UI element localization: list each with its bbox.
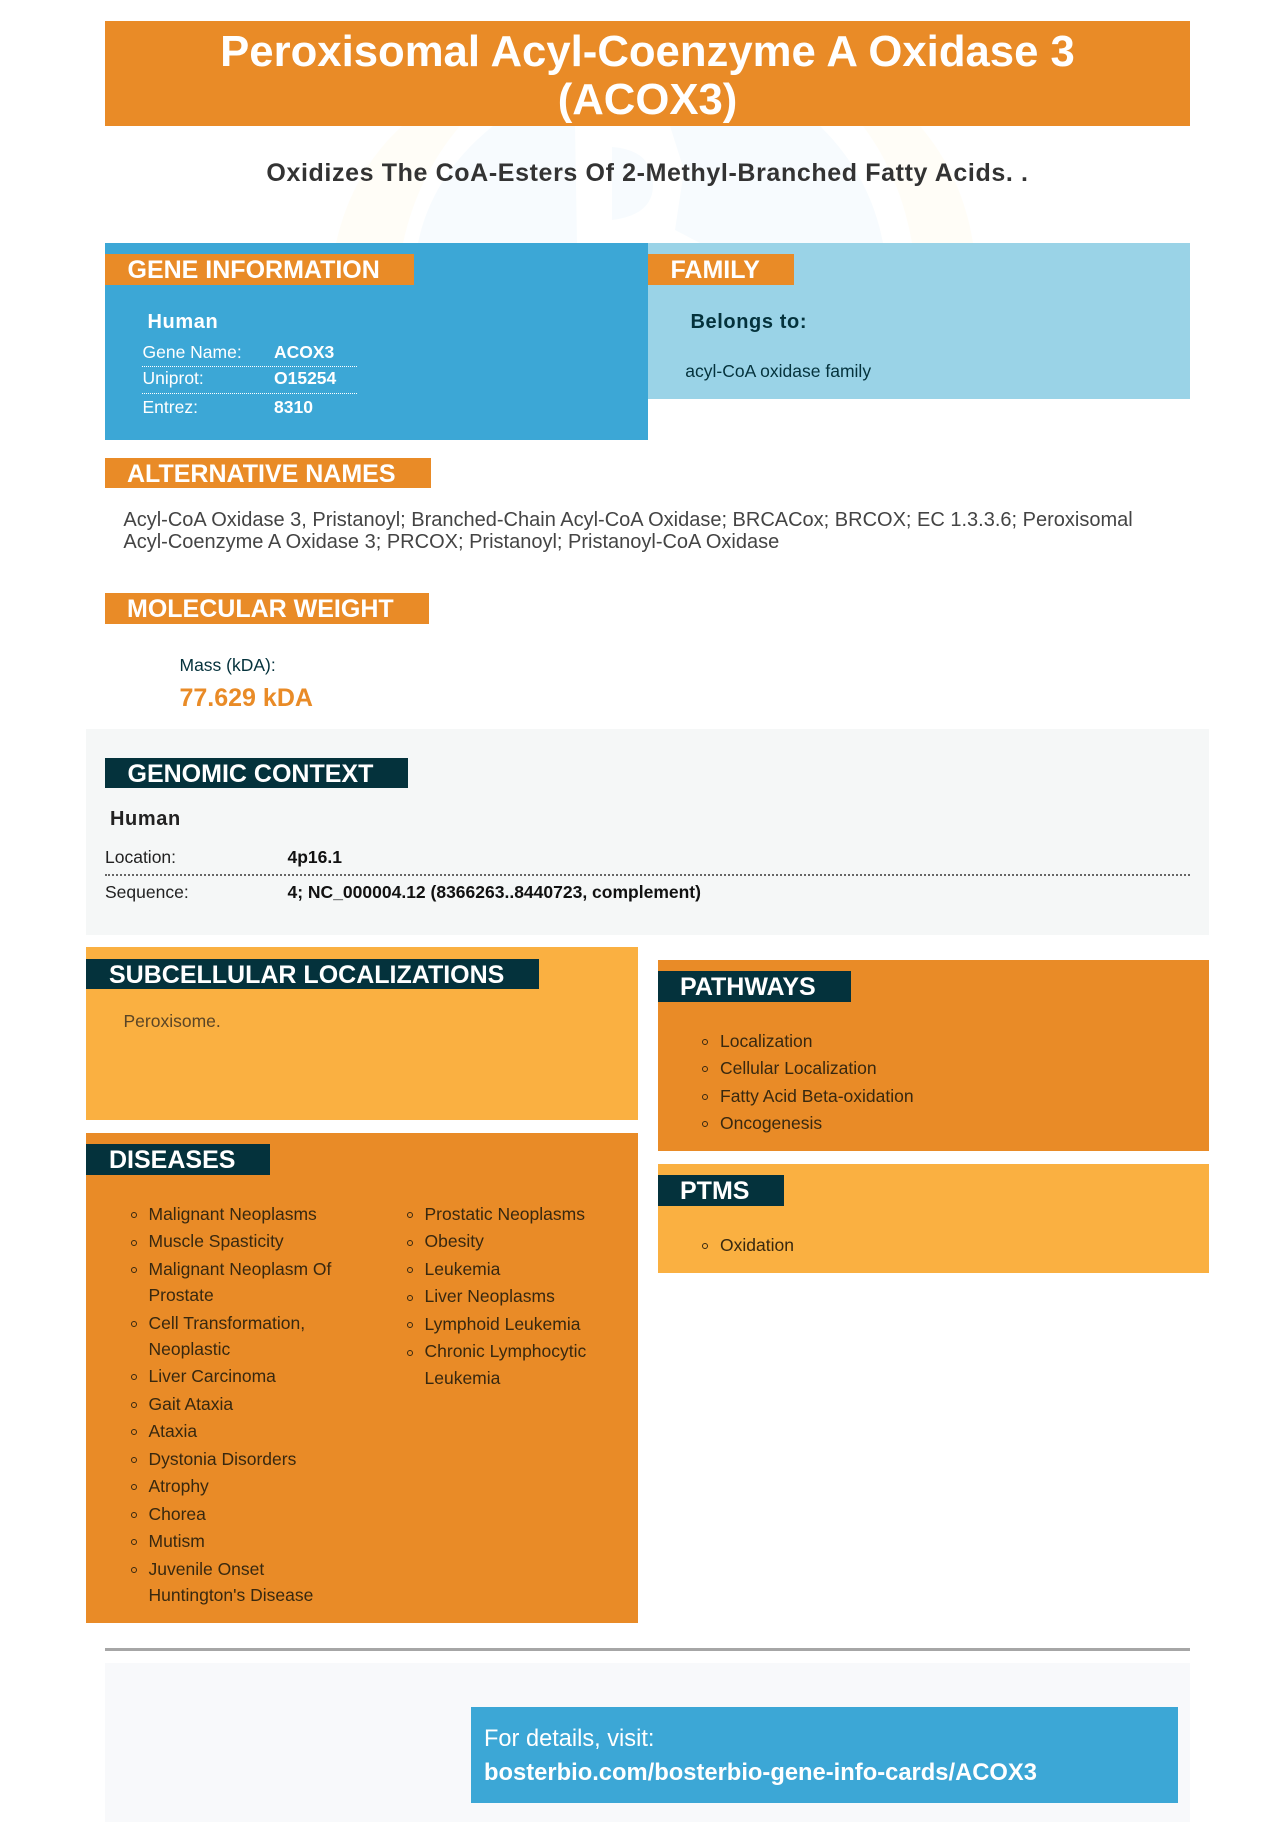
diseases list column 1	[131, 1204, 332, 1604]
alternative names text: Acyl-Coenzyme A Oxidase 3; PRCOX; Pristanoyl; Pristanoyl-CoA Oxidase	[123, 531, 779, 553]
title banner	[105, 21, 1190, 126]
uniprot row: O15254	[274, 368, 336, 388]
panel: family	[648, 243, 1190, 399]
title banner: (ACOX3)	[558, 75, 737, 124]
heading: family: FAMILY	[670, 256, 760, 284]
alternative names text	[123, 509, 1133, 553]
diseases list column 1: Juvenile Onset	[148, 1558, 264, 1578]
diseases list column 1: Cell Transformation,	[148, 1312, 305, 1332]
diseases list column 2	[407, 1204, 586, 1388]
diseases list column 2: Chronic Lymphocytic	[424, 1340, 586, 1360]
pathways list: Fatty Acid Beta-oxidation	[720, 1086, 914, 1106]
diseases list column 1: Muscle Spasticity	[148, 1230, 284, 1250]
callout url: bosterbio.com/bosterbio-gene-info-cards/ACOX3	[484, 1759, 1037, 1786]
uniprot row: Uniprot:	[142, 368, 204, 388]
sequence row: 4; NC_000004.12 (8366263..8440723, complement)	[288, 882, 701, 902]
panel: gene information	[105, 243, 648, 440]
localization text: Peroxisome.	[124, 1011, 221, 1031]
heading: ptms	[658, 1175, 784, 1206]
molecular weight value	[180, 655, 313, 712]
heading: diseases	[86, 1144, 270, 1175]
heading: subcellular localizations: SUBCELLULAR LOCALIZATIONS	[109, 961, 504, 989]
panel: ptms	[658, 1164, 1209, 1273]
title banner: Peroxisomal Acyl-Coenzyme A Oxidase 3	[220, 27, 1075, 76]
diseases list column 1: Atrophy	[148, 1476, 209, 1496]
diseases list column 1: Mutism	[148, 1531, 205, 1551]
belongs to label: Belongs to:	[690, 311, 807, 333]
panel: pathways	[658, 960, 1209, 1151]
diseases list column 1: Gait Ataxia	[148, 1394, 233, 1414]
panel: subcellular localizations	[86, 947, 638, 1120]
heading: ptms: PTMS	[680, 1177, 749, 1205]
diseases list column 2: Liver Neoplasms	[424, 1286, 555, 1306]
gene name row: ACOX3	[274, 342, 334, 362]
diseases list column 1: Chorea	[148, 1504, 206, 1524]
species label: Human	[110, 808, 181, 830]
diseases list column 1: Malignant Neoplasm Of	[148, 1259, 331, 1279]
location row: Location:	[105, 847, 176, 867]
diseases list column 2: Leukemia	[424, 1259, 500, 1279]
heading: pathways: PATHWAYS	[680, 973, 816, 1001]
entrez row: 8310	[274, 397, 313, 417]
gene name row: Gene Name:	[142, 342, 242, 362]
heading: molecular weight: MOLECULAR WEIGHT	[127, 594, 394, 622]
heading: genomic context: GENOMIC CONTEXT	[128, 760, 373, 788]
location row	[105, 847, 1190, 876]
heading: pathways	[658, 971, 851, 1002]
diseases list column 1: Neoplastic	[148, 1338, 230, 1358]
callout label: For details, visit:	[484, 1726, 654, 1752]
gene name row	[142, 342, 357, 367]
panel: genomic context	[86, 729, 1209, 935]
alternative names text: Acyl-CoA Oxidase 3, Pristanoyl; Branched-Chain Acyl-CoA Oxidase; BRCACox; BRCOX; EC 1.3.3.6; Peroxisomal	[123, 509, 1133, 531]
diseases list column 2: Leukemia	[424, 1368, 500, 1388]
heading: alternative names: ALTERNATIVE NAMES	[127, 460, 396, 488]
heading: family	[648, 254, 794, 285]
diseases list column 1: Malignant Neoplasms	[148, 1204, 317, 1224]
pathways list	[702, 1031, 914, 1133]
callout: details link	[471, 1707, 1178, 1803]
diseases list column 1: Prostate	[148, 1285, 214, 1305]
diseases list column 1: Liver Carcinoma	[148, 1366, 276, 1386]
pathways list: Localization	[720, 1031, 812, 1051]
diseases list column 1: Dystonia Disorders	[148, 1448, 296, 1468]
pathways list: Oncogenesis	[720, 1113, 822, 1133]
sequence row: Sequence:	[105, 882, 189, 902]
watermark logo	[0, 0, 1288, 260]
panel: diseases	[86, 1133, 638, 1623]
species label: Human	[148, 311, 218, 333]
diseases list column 2: Lymphoid Leukemia	[424, 1314, 580, 1334]
pathways list: Cellular Localization	[720, 1058, 877, 1078]
mass value: 77.629 kDA	[180, 684, 313, 712]
uniprot row	[142, 368, 357, 394]
subtitle: Oxidizes The CoA-Esters Of 2-Methyl-Branched Fatty Acids. .	[266, 159, 1029, 187]
diseases list column 2: Prostatic Neoplasms	[424, 1204, 585, 1224]
family value: acyl-CoA oxidase family	[685, 361, 871, 381]
mass label: Mass (kDA):	[180, 655, 276, 675]
entrez row	[142, 397, 313, 417]
sequence row	[105, 882, 701, 902]
location row: 4p16.1	[288, 847, 342, 867]
diseases list column 2: Obesity	[424, 1230, 484, 1250]
panel: footer	[105, 1663, 1190, 1822]
entrez row: Entrez:	[142, 397, 198, 417]
heading: diseases: DISEASES	[109, 1146, 235, 1174]
diseases list column 1: Huntington's Disease	[148, 1584, 313, 1604]
ptms list: Oxidation	[720, 1235, 794, 1255]
diseases list column 1: Ataxia	[148, 1421, 197, 1441]
heading: gene information: GENE INFORMATION	[128, 256, 380, 284]
